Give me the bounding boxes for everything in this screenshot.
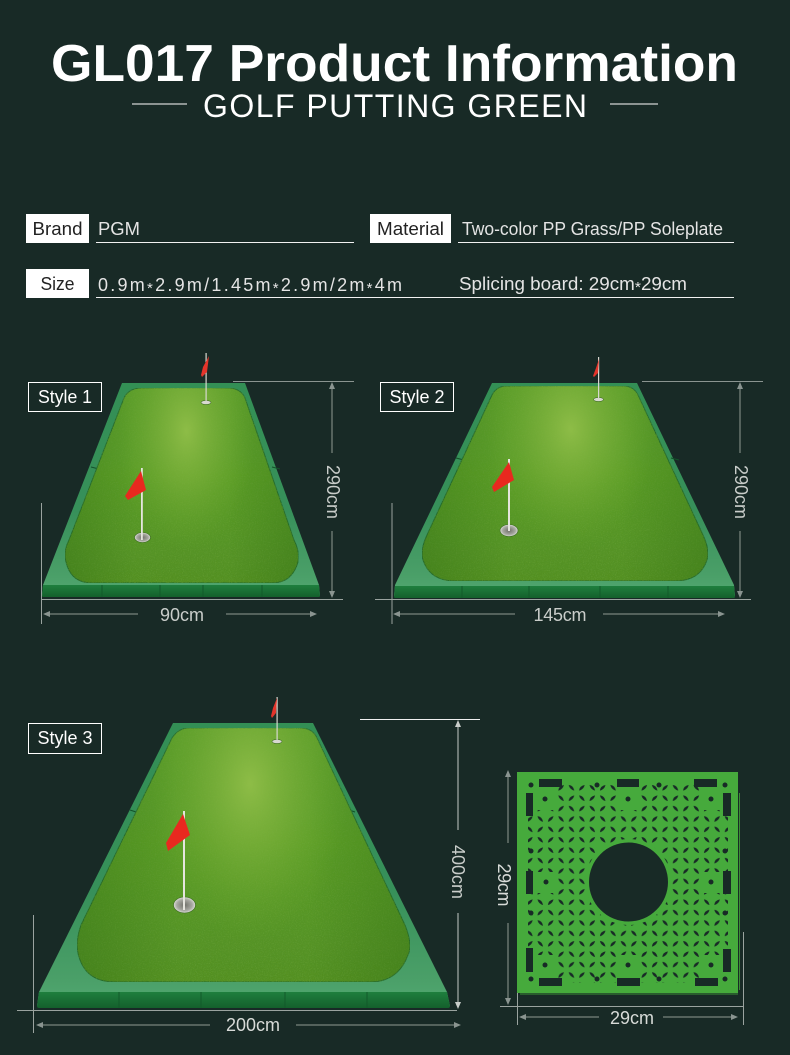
rectangular slots	[526, 779, 731, 986]
screw holes	[528, 782, 728, 982]
back flag	[593, 357, 604, 402]
dimension: width 29cm: 29cm	[610, 1008, 654, 1028]
dimension: width 90cm: 90cm	[160, 605, 204, 625]
dimension: height 29cm	[494, 770, 514, 1005]
front flag	[492, 459, 518, 536]
grass surface	[77, 728, 410, 982]
spec row: size: 2.9m/1.45m	[155, 275, 270, 295]
dimension: width 200cm	[17, 915, 461, 1035]
mat frame	[42, 383, 320, 597]
title: GL017 Product Information	[51, 35, 738, 93]
grass surface	[65, 388, 298, 583]
spec row: size	[26, 269, 734, 298]
panel: splicing board	[494, 770, 744, 1028]
spec row: size: *	[367, 280, 373, 297]
front flag	[125, 468, 150, 542]
dimension: height 290cm: 290cm	[323, 465, 343, 519]
panel: style 3 putting green	[17, 697, 480, 1035]
spec row: size: *	[273, 280, 279, 297]
spec row: material	[370, 214, 734, 243]
panel: style 1 putting green	[28, 353, 354, 625]
label: style 1	[28, 382, 102, 412]
mat frame	[394, 383, 735, 598]
front flag	[166, 811, 196, 913]
centre hole	[586, 839, 672, 925]
spec row: size: 0.9m	[98, 275, 145, 295]
spec row: size: Splicing board: 29cm	[459, 274, 627, 294]
dimension: width 90cm	[42, 503, 343, 625]
spec row: size: *	[147, 280, 153, 297]
spec row: brand: PGM	[98, 219, 140, 239]
spec row: brand	[26, 214, 354, 243]
perforated pattern	[528, 782, 728, 983]
dimension: height 290cm: 290cm	[731, 465, 751, 519]
spec row: size: *	[635, 279, 641, 296]
back flag	[271, 697, 282, 744]
label: style 3: Style 3	[38, 728, 92, 748]
spec row: size: 29cm	[641, 274, 687, 294]
spec row: size: 2.9m/2m	[281, 275, 364, 295]
board plate	[517, 772, 740, 994]
spec row: size: 4m	[375, 275, 402, 295]
dimension: height 400cm	[360, 720, 480, 1009]
dimension: width 200cm: 200cm	[226, 1015, 280, 1035]
dimension: height 400cm: 400cm	[448, 845, 468, 899]
dimension: height 29cm: 29cm	[494, 864, 514, 906]
grass surface	[422, 386, 708, 581]
label: style 3	[28, 724, 102, 754]
dimension: width 145cm: 145cm	[534, 605, 586, 625]
label: style 2	[380, 382, 454, 412]
dimension: width 29cm	[500, 932, 744, 1028]
subtitle with side rules: GOLF PUTTING GREEN	[203, 88, 587, 124]
spec row: material: Two-color PP Grass/PP Soleplate	[462, 219, 723, 239]
spec row: brand: Brand	[32, 219, 82, 239]
dimension: height 290cm	[233, 382, 354, 598]
label: style 2: Style 2	[390, 387, 444, 407]
dimension: height 290cm	[642, 382, 763, 598]
label: style 1: Style 1	[38, 387, 92, 407]
spec row: size: Size	[40, 274, 74, 294]
mat frame	[37, 723, 450, 1008]
back flag	[201, 353, 211, 404]
spec row: material: Material	[377, 219, 444, 239]
panel: style 2 putting green	[375, 357, 763, 625]
dimension: width 145cm	[375, 503, 751, 625]
